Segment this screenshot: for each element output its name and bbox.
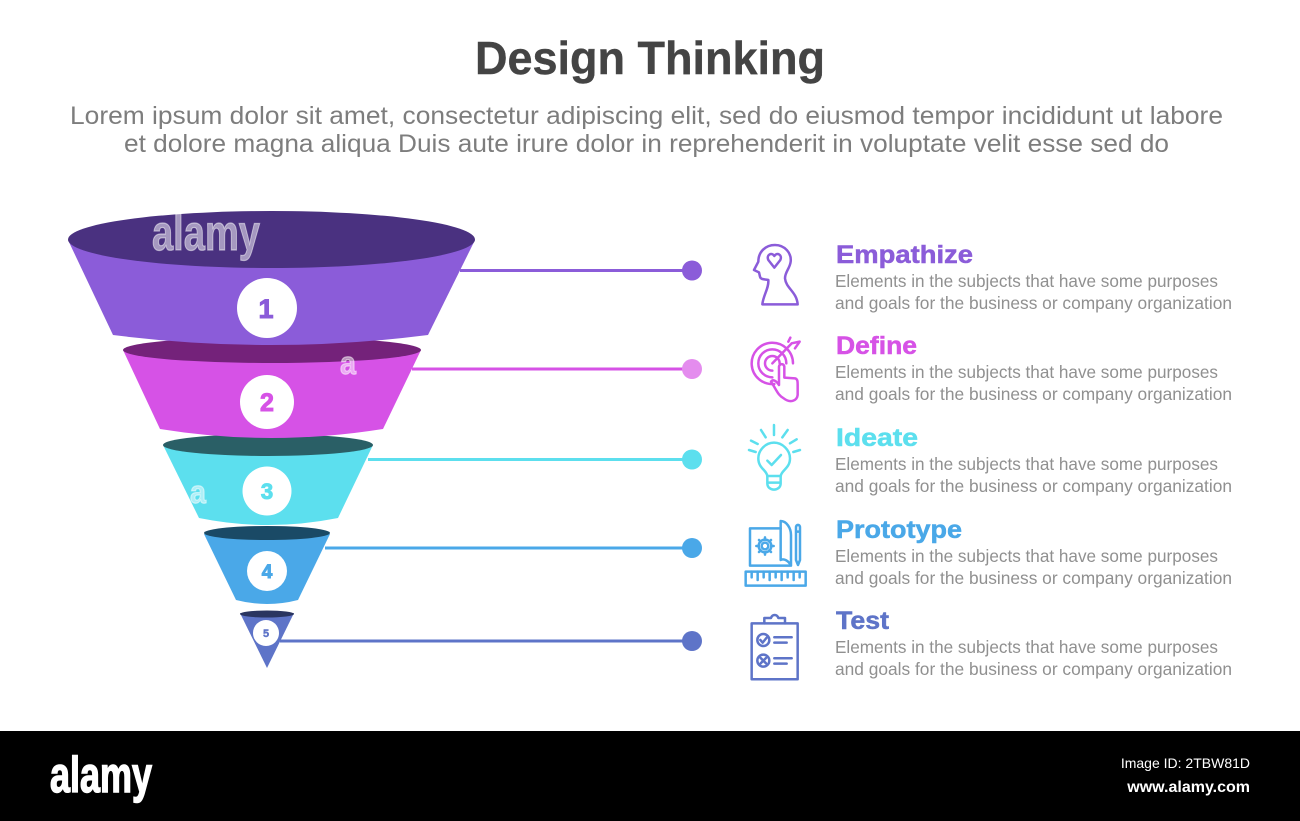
connector lines [280,260,702,651]
watermark on funnel: a [190,474,206,510]
heading: Prototype [836,516,962,544]
item: Test [752,607,1232,679]
heading: Ideate [836,424,918,452]
funnel segment 1: 1 [258,294,274,324]
description [835,454,1232,496]
funnel segment 2: 2 [260,389,274,417]
heading: Test [836,607,890,635]
heading: Define [836,332,917,360]
description [835,546,1232,588]
item: Prototype [746,516,1232,588]
description [835,362,1232,404]
description: Elements in the subjects that have some purposes [835,271,1218,291]
funnel segment 2 [123,337,421,438]
item: Define [752,332,1232,404]
watermark on funnel: a [340,345,356,381]
funnel segment 4: 4 [262,562,273,583]
funnel segment 1 [68,211,475,345]
description [835,637,1232,679]
icon: target with hand [752,338,800,401]
icon: light bulb [749,425,800,490]
description: and goals for the business or company organization [835,384,1232,404]
funnel segment 5 [240,610,294,668]
footer image id: Image ID: 2TBW81D [1121,755,1250,771]
icon: blueprint, pencil and ruler [746,521,806,586]
intro text block [70,102,1223,158]
description: and goals for the business or company organization [835,293,1232,313]
intro text block: et dolore magna aliqua Duis aute irure dolor in reprehenderit in voluptate velit esse sed do [124,130,1169,158]
item: Ideate [749,424,1232,496]
description [835,271,1232,313]
funnel segment 3: 3 [261,479,273,504]
description: Elements in the subjects that have some purposes [835,546,1218,566]
watermark on funnel: alamy [152,205,260,261]
title: Design Thinking [475,32,825,84]
description: Elements in the subjects that have some purposes [835,454,1218,474]
icon: clipboard checklist [752,615,798,679]
watermark on funnel [152,205,356,510]
footer bar [0,731,1300,821]
heading: Empathize [836,241,973,269]
footer logo: alamy [50,747,152,803]
intro text block: Lorem ipsum dolor sit amet, consectetur adipiscing elit, sed do eiusmod tempor incididunt ut labore [70,102,1223,130]
description: Elements in the subjects that have some purposes [835,637,1218,657]
description: and goals for the business or company organization [835,568,1232,588]
funnel segment 5: 5 [263,628,269,640]
description: and goals for the business or company organization [835,476,1232,496]
funnel segment 3 [163,434,373,525]
description: Elements in the subjects that have some purposes [835,362,1218,382]
footer url: www.alamy.com [1126,779,1250,796]
item: Empathize [754,241,1232,313]
icon: head with heart [754,245,798,304]
description: and goals for the business or company organization [835,659,1232,679]
funnel segment 4 [204,526,330,604]
funnel chart [68,211,475,668]
